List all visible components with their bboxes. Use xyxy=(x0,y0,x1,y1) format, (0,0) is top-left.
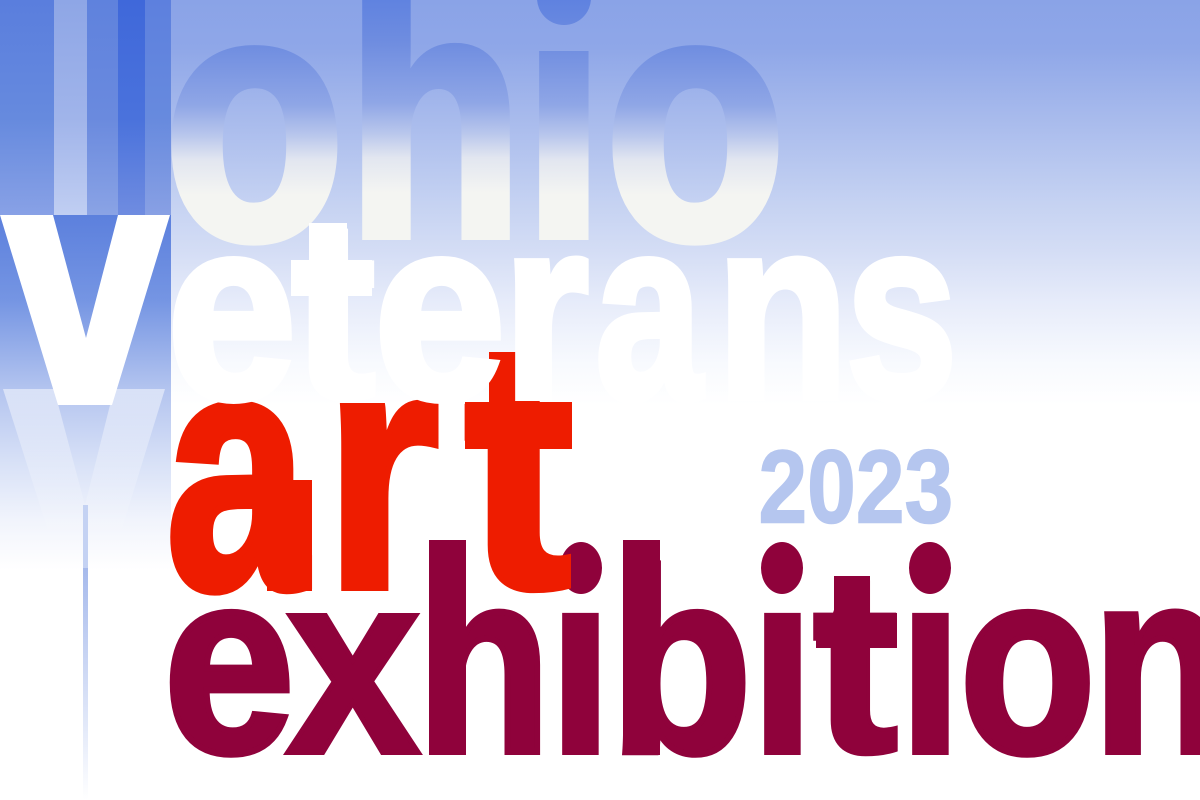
word: Veterans (remainder after V): t xyxy=(290,166,377,452)
word: exhibition: e xyxy=(164,516,295,800)
word: exhibition xyxy=(170,540,1200,758)
faded V reflection xyxy=(3,389,165,600)
word: art: r xyxy=(323,278,440,661)
word: exhibition: t xyxy=(812,517,899,800)
word: exhibition: b xyxy=(610,518,752,800)
large letter V: V xyxy=(0,156,171,464)
word: Veterans (remainder after V): a xyxy=(596,166,704,452)
word: Veterans (remainder after V) xyxy=(167,166,957,453)
year: 2023: 2023 xyxy=(758,429,953,545)
word: ohio xyxy=(172,0,778,246)
word: art xyxy=(170,352,572,596)
word: Veterans (remainder after V): s xyxy=(846,166,957,452)
word: Veterans (remainder after V): r xyxy=(503,166,589,452)
word: art: a xyxy=(166,280,309,661)
word: Veterans (remainder after V): n xyxy=(716,166,849,452)
panel: left stripe column xyxy=(0,0,171,575)
word: Veterans (remainder after V): e xyxy=(374,167,505,453)
word: exhibition: x xyxy=(286,519,420,800)
word: exhibition: o xyxy=(960,518,1096,800)
thin vertical line below V xyxy=(83,505,88,800)
word: exhibition: h xyxy=(417,518,551,800)
word: Veterans (remainder after V): e xyxy=(167,166,296,452)
background gradient xyxy=(0,0,1200,405)
word: art: t xyxy=(463,278,578,660)
